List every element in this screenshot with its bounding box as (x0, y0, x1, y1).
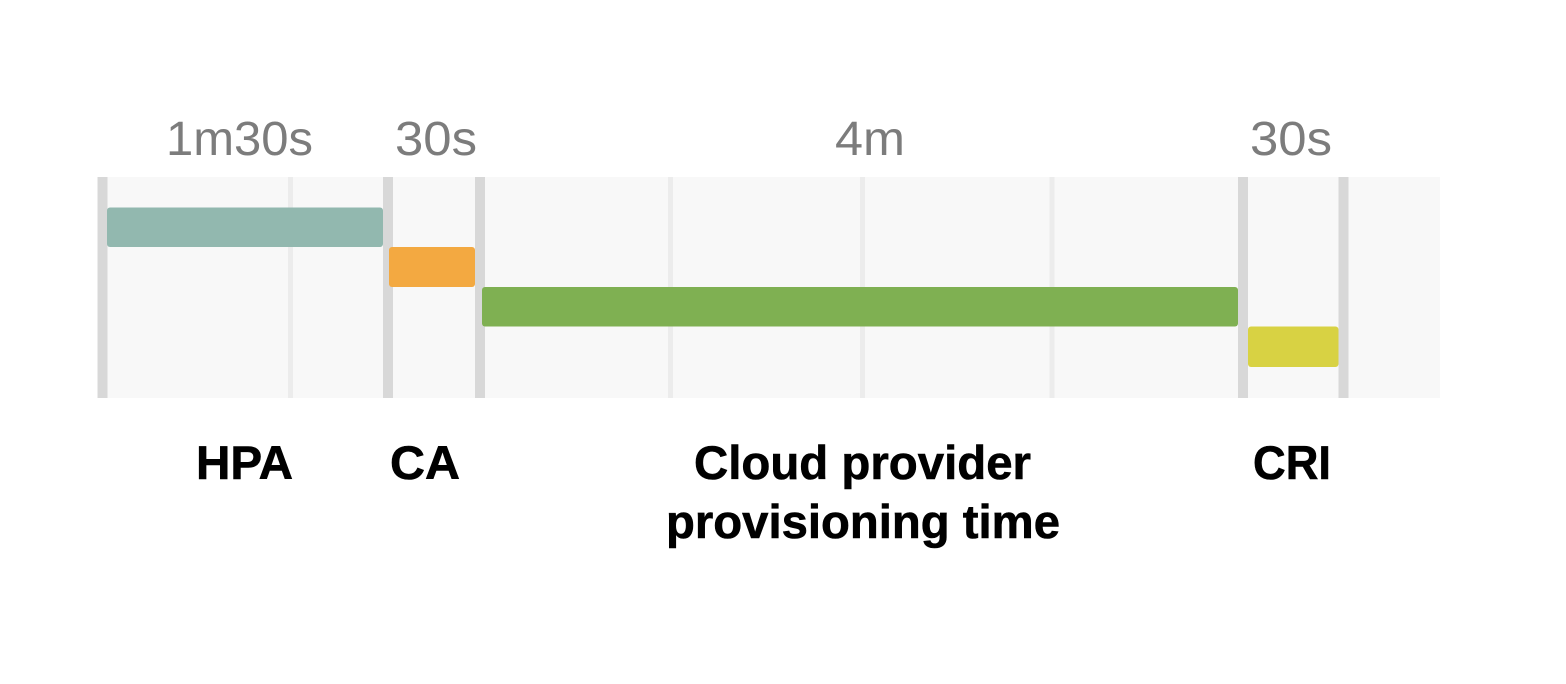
phase labels (196, 436, 1331, 548)
bar: CRI (1248, 326, 1338, 367)
duration: CA 30s: 30s (395, 113, 477, 166)
duration labels (166, 113, 1332, 166)
bar: cloud provider (482, 287, 1238, 326)
bar: CA (389, 247, 475, 287)
label: CA: CA (390, 436, 460, 489)
label: Cloud provider provisioning time: Cloud provider (694, 436, 1031, 489)
label: CRI: CRI (1253, 436, 1331, 489)
duration: CRI 30s: 30s (1250, 113, 1332, 166)
chart background (98, 177, 1440, 398)
label: HPA: HPA (196, 436, 293, 489)
bar: HPA (107, 208, 383, 247)
duration: cloud provider 4m: 4m (835, 113, 905, 166)
chart: provisioning timeline (98, 177, 1440, 398)
label: Cloud provider provisioning time: provisioning time (666, 495, 1060, 548)
label: Cloud provider provisioning time (666, 436, 1060, 548)
duration: HPA 1m30s: 1m30s (166, 113, 313, 166)
